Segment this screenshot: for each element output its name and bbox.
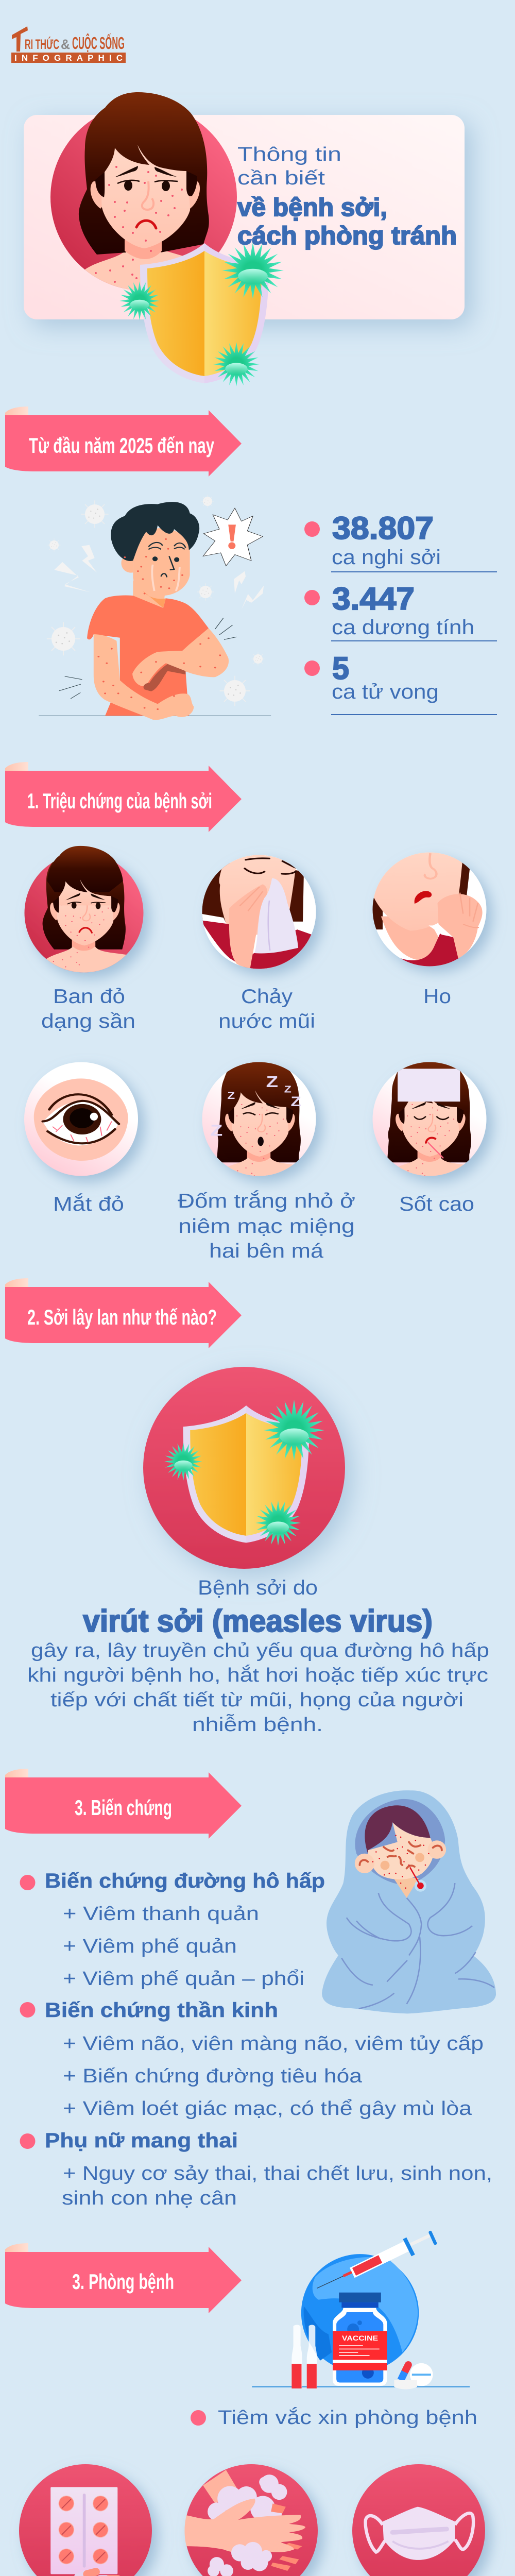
symptom: koplik spots: Z bbox=[227, 1090, 235, 1101]
text block: measles virus bbox=[27, 1577, 489, 1736]
banner: 1. Triệu chứng của bệnh sởi: 1. Triệu chứng của bệnh sởi bbox=[27, 789, 212, 813]
label: Sốt cao bbox=[399, 1193, 474, 1215]
stat: suspected cases: ca nghi sởi bbox=[332, 546, 441, 569]
bullet: vaccination: Tiêm vắc xin phòng bệnh bbox=[218, 2406, 477, 2429]
symptom: koplik spots bbox=[178, 1054, 355, 1262]
text block: measles virus: nhiễm bệnh. bbox=[192, 1714, 323, 1736]
item: pregnant women: Phụ nữ mang thai bbox=[45, 2129, 238, 2152]
banner: 3. Phòng bệnh: 3. Phòng bệnh bbox=[72, 2269, 174, 2294]
text block: measles virus: gây ra, lây truyền chủ yếu qua đường hô hấp bbox=[31, 1640, 489, 1662]
icons: pale virus particles bbox=[47, 495, 265, 706]
banner: 3. Biến chứng: 3. Biến chứng bbox=[75, 1795, 172, 1820]
logo: CUỘC SỐNG bbox=[72, 33, 125, 53]
logo bbox=[11, 26, 126, 63]
text block: measles virus: khi người bệnh ho, hắt hơi hoặc tiếp xúc trực bbox=[27, 1664, 488, 1686]
label bbox=[41, 986, 135, 1032]
text block: measles virus: Bệnh sởi do bbox=[198, 1577, 318, 1599]
label: nước mũi bbox=[218, 1010, 315, 1032]
label: Chảy bbox=[241, 986, 293, 1008]
text block: measles virus: tiếp với chất tiết từ mũi, họng của người bbox=[50, 1689, 464, 1711]
stats list bbox=[304, 511, 497, 715]
stat: suspected cases: 38.807 bbox=[332, 511, 434, 546]
banner: 3. Phòng bệnh bbox=[5, 2243, 242, 2313]
label bbox=[178, 1190, 355, 1262]
item: pregnant women bbox=[20, 2129, 492, 2209]
symptom: koplik spots: Z bbox=[284, 1084, 291, 1095]
symptom: high fever bbox=[373, 1054, 486, 1215]
symptom: koplik spots: Z bbox=[266, 1074, 278, 1091]
item: pregnant women: + Nguy cơ sảy thai, thai chết lưu, sinh non, bbox=[63, 2163, 492, 2184]
item: neurological: Biến chứng thần kinh bbox=[45, 1999, 278, 2022]
item: neurological: + Biến chứng đường tiêu hóa bbox=[63, 2065, 363, 2087]
text block: measles virus: virút sởi (measles virus) bbox=[83, 1604, 433, 1638]
symptom: rash bbox=[25, 846, 143, 1032]
list: complications bbox=[20, 1870, 492, 2209]
icon: hand washing bbox=[184, 2464, 318, 2576]
item: respiratory bbox=[20, 1870, 325, 1990]
banner: Từ đầu năm 2025 đến nay: Từ đầu năm 2025 đến nay bbox=[29, 433, 214, 457]
stat: positive cases: ca dương tính bbox=[332, 616, 474, 639]
symptom: koplik spots: Z bbox=[210, 1121, 222, 1140]
stat: deaths: 5 bbox=[332, 651, 349, 686]
logo: RI THỨC bbox=[25, 36, 59, 52]
banner: Từ đầu năm 2025 đến nay bbox=[5, 406, 242, 477]
illustration: vaccine: VACCINE bbox=[342, 2334, 378, 2342]
symptom: red eye bbox=[24, 1062, 138, 1215]
stat: deaths: ca tử vong bbox=[332, 681, 439, 703]
title: cần biết bbox=[237, 167, 325, 189]
title: cách phòng tránh bbox=[237, 222, 457, 250]
stat: positive cases bbox=[304, 581, 497, 641]
illustration: woman with rash bbox=[50, 92, 237, 291]
label: hai bên má bbox=[209, 1240, 323, 1262]
banner: 2. Sởi lây lan như thế nào bbox=[5, 1278, 242, 1348]
symptom: runny nose bbox=[197, 851, 322, 1032]
label: Ban đỏ bbox=[53, 986, 125, 1008]
stat: suspected cases bbox=[304, 511, 497, 572]
banner: 2. Sởi lây lan như thế nào: 2. Sởi lây lan như thế nào? bbox=[27, 1305, 217, 1329]
panel: hero card bbox=[24, 92, 465, 386]
item: neurological: + Viêm loét giác mạc, có thể gây mù lòa bbox=[63, 2098, 472, 2120]
item: respiratory: Biến chứng đường hô hấp bbox=[45, 1870, 325, 1892]
icon: face mask bbox=[352, 2464, 485, 2576]
item: respiratory: + Viêm thanh quản bbox=[63, 1903, 259, 1925]
title: Thông tin bbox=[237, 144, 341, 165]
symptom: cough bbox=[368, 848, 493, 1008]
banner: 1. Triệu chứng của bệnh sởi bbox=[5, 762, 242, 832]
title: về bệnh sởi, bbox=[237, 194, 387, 222]
label: Ho bbox=[423, 986, 451, 1008]
item: neurological bbox=[20, 1999, 484, 2120]
label: Đốm trắng nhỏ ở bbox=[178, 1190, 355, 1212]
item: respiratory: + Viêm phế quản – phổi bbox=[63, 1968, 304, 1990]
label: Mắt đỏ bbox=[53, 1193, 124, 1215]
stat: positive cases: 3.447 bbox=[332, 581, 415, 616]
icon: pills bbox=[19, 2464, 152, 2576]
illustration: vaccine bbox=[252, 2232, 470, 2389]
item: pregnant women: sinh con nhẹ cân bbox=[62, 2188, 237, 2209]
icon: shield with viruses bbox=[119, 242, 284, 386]
symptom: koplik spots: Z bbox=[290, 1094, 301, 1109]
stat: deaths bbox=[304, 651, 497, 715]
illustration: child in blanket bbox=[322, 1790, 496, 2013]
logo: & bbox=[61, 37, 70, 52]
item: neurological: + Viêm não, viên màng não, viêm tủy cấp bbox=[63, 2033, 484, 2055]
label: dạng sần bbox=[41, 1010, 135, 1032]
label: niêm mạc miệng bbox=[178, 1215, 355, 1238]
item: respiratory: + Viêm phế quản bbox=[63, 1936, 237, 1957]
logo: INFOGRAPHIC bbox=[14, 53, 123, 63]
icon: shield in red circle bbox=[143, 1367, 345, 1569]
label bbox=[218, 986, 315, 1032]
banner: 3. Biến chứng bbox=[5, 1769, 242, 1839]
title bbox=[237, 144, 457, 250]
illustration: man with rash bbox=[39, 502, 271, 720]
